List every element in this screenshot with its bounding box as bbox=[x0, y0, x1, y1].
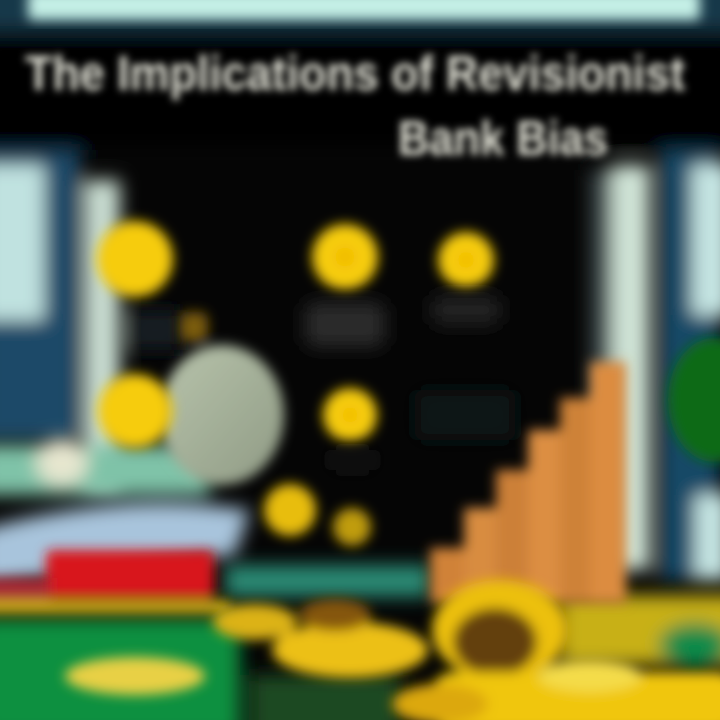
grey-green sphere bbox=[160, 312, 284, 485]
red block bbox=[0, 550, 230, 614]
dim text placeholders under markers bbox=[305, 295, 515, 470]
title bbox=[25, 47, 685, 166]
green sphere at right bbox=[668, 338, 720, 462]
title: Bank Bias bbox=[398, 112, 608, 166]
orange staircase bar chart bbox=[430, 362, 626, 603]
gold coins on floor bbox=[65, 580, 720, 720]
floor: green ground bbox=[0, 565, 720, 720]
left stack: books and cushion bbox=[0, 438, 250, 585]
top light bar bbox=[28, 0, 700, 20]
yellow circle markers bbox=[97, 221, 494, 546]
